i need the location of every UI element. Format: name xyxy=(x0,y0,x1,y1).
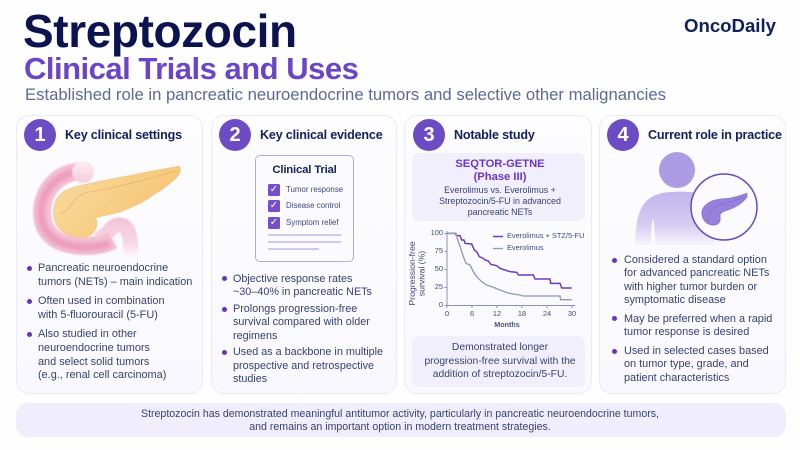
panel: notable study xyxy=(404,115,592,394)
panel: key clinical settings xyxy=(16,115,203,394)
text: symptomatic disease xyxy=(624,294,726,306)
checklist row: symptom relief: ✓ xyxy=(270,217,278,228)
bullet list: evidence xyxy=(222,273,383,385)
text: Considered a standard option xyxy=(624,254,767,266)
checklist row: tumor response xyxy=(268,184,343,196)
checklist row: tumor response: Tumor response xyxy=(286,185,343,194)
text: regimens xyxy=(233,330,277,342)
badge 2: 2 xyxy=(229,124,241,146)
text: 18 xyxy=(518,309,526,318)
text: and select solid tumors xyxy=(38,356,149,368)
text: Used as a backbone in multiple xyxy=(233,346,383,358)
checklist row: tumor response: ✓ xyxy=(270,184,278,195)
summary banner xyxy=(16,403,786,437)
badge 1: 1 xyxy=(34,124,46,146)
study description: pancreatic NETs xyxy=(468,207,532,217)
text: 50 xyxy=(435,264,443,273)
result box: Demonstrated longer xyxy=(452,342,548,353)
text: patient characteristics xyxy=(624,372,729,384)
study description xyxy=(439,185,561,217)
text: neuroendocrine tumors xyxy=(38,342,150,354)
text: (e.g., renal cell carcinoma) xyxy=(38,369,166,381)
bullet list: practice xyxy=(612,254,772,384)
text: 25 xyxy=(435,282,443,291)
study description: Streptozocin/5-FU in advanced xyxy=(439,196,561,206)
text: 6 xyxy=(470,309,474,318)
text: Months xyxy=(494,320,520,329)
y axis title: survival (%) xyxy=(416,251,426,296)
text: 75 xyxy=(435,246,443,255)
checklist row: symptom relief xyxy=(268,217,339,229)
text: 12 xyxy=(493,309,501,318)
checklist row: symptom relief: Symptom relief xyxy=(286,218,339,227)
text: tumor response is desired xyxy=(624,326,749,338)
bullet list: settings xyxy=(27,262,192,381)
title: Streptozocin xyxy=(23,5,297,57)
heading 4: Current role in practice xyxy=(648,128,782,142)
heading 2: Key clinical evidence xyxy=(260,128,383,142)
text: on tumor type, grade, and xyxy=(624,358,749,370)
text: 24 xyxy=(543,309,551,318)
text: tumors (NETs) – main indication xyxy=(38,276,192,288)
study phase: (Phase III) xyxy=(474,171,526,183)
clinical trial form xyxy=(255,155,354,262)
text: May be preferred when a rapid xyxy=(624,313,772,325)
checklist row: disease control: Disease control xyxy=(286,201,340,210)
text: with 5-fluorouracil (5-FU) xyxy=(38,309,158,321)
study name: SEQTOR-GETNE xyxy=(455,158,545,170)
badge 1 xyxy=(24,119,56,151)
result box xyxy=(412,336,585,387)
text: Objective response rates xyxy=(233,273,352,285)
study description: Everolimus vs. Everolimus + xyxy=(444,185,556,195)
text: Everolimus + STZ/5-FU xyxy=(507,231,584,240)
summary banner: and remains an important option in modern treatment strategies. xyxy=(249,421,551,433)
text: 0 xyxy=(445,309,449,318)
chart labels xyxy=(431,228,584,329)
text: for advanced pancreatic NETs xyxy=(624,267,769,279)
logo: OncoDaily xyxy=(684,15,776,36)
badge 3: 3 xyxy=(423,124,435,146)
result box: progression-free survival with the xyxy=(424,356,576,367)
text: Used in selected cases based xyxy=(624,345,769,357)
text: Often used in combination xyxy=(38,295,165,307)
text: 100 xyxy=(431,228,443,237)
text: 30 xyxy=(568,309,576,318)
study summary box xyxy=(412,153,585,221)
tagline: Established role in pancreatic neuroendocrine tumors and selective other malignancies xyxy=(25,85,666,104)
result box: addition of streptozocin/5-FU. xyxy=(433,369,567,380)
text: Prolongs progression-free xyxy=(233,303,357,315)
checklist row: disease control: ✓ xyxy=(270,200,278,211)
text: survival compared with older xyxy=(233,316,370,328)
text: 0 xyxy=(439,300,443,309)
text: Everolimus xyxy=(507,243,544,252)
badge 3 xyxy=(413,119,445,151)
text: ~30–40% in pancreatic NETs xyxy=(233,286,372,298)
panel: current role in practice xyxy=(599,115,786,394)
checklist row: disease control xyxy=(268,200,340,212)
panel: key clinical evidence xyxy=(211,115,397,394)
text: with higher tumor burden or xyxy=(624,281,757,293)
form title: Clinical Trial xyxy=(272,164,337,176)
badge 4 xyxy=(607,119,639,151)
heading 3: Notable study xyxy=(454,128,535,142)
badge 2 xyxy=(219,119,251,151)
text: studies xyxy=(233,373,267,385)
badge 4: 4 xyxy=(617,124,629,146)
subtitle: Clinical Trials and Uses xyxy=(24,51,358,86)
y axis title: Progression-free xyxy=(407,241,417,306)
text: Also studied in other xyxy=(38,328,137,340)
text: Pancreatic neuroendocrine xyxy=(38,262,168,274)
heading 1: Key clinical settings xyxy=(65,128,182,142)
summary banner: Streptozocin has demonstrated meaningful antitumor activity, particularly in pancreatic neuroendocrine tumors, xyxy=(141,408,659,420)
text: prospective and retrospective xyxy=(233,360,374,372)
